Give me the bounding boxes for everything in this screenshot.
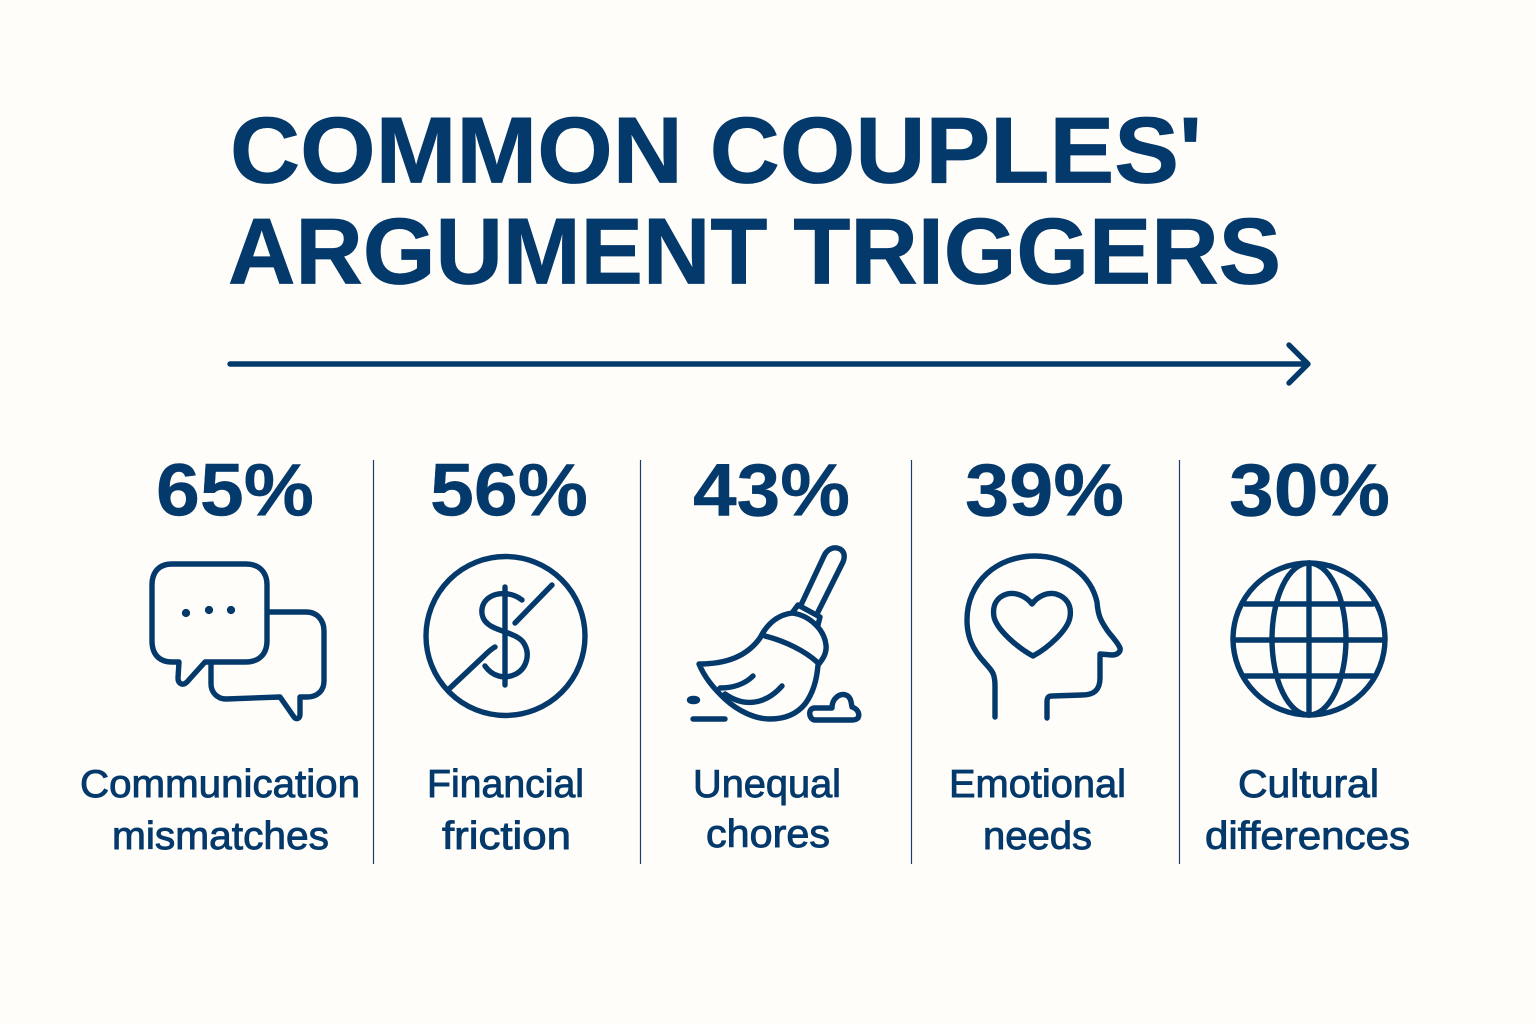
label: communication mismatches [80, 763, 360, 858]
label: financial friction: Financial [427, 763, 584, 806]
title [228, 98, 1281, 304]
icon: speech bubbles [152, 564, 324, 719]
icon: globe [1233, 563, 1385, 715]
percentage: 56%: 56% [430, 448, 588, 532]
title: ARGUMENT TRIGGERS [228, 198, 1281, 304]
label: communication mismatches: Communication [80, 763, 360, 806]
percentage: 43%: 43% [693, 448, 850, 532]
icon: crossed dollar [426, 556, 585, 716]
column: cultural differences [1205, 448, 1410, 858]
percentage: 65%: 65% [156, 448, 314, 532]
label: unequal chores: Unequal [693, 763, 841, 806]
label: unequal chores: chores [706, 813, 830, 856]
label: emotional needs [949, 763, 1126, 858]
label: cultural differences: Cultural [1238, 763, 1379, 806]
label: financial friction: friction [442, 815, 571, 858]
label: financial friction [427, 763, 584, 858]
label: cultural differences [1205, 763, 1410, 858]
column: financial friction [426, 448, 588, 858]
column: communication mismatches [80, 448, 360, 858]
percentage: 30%: 30% [1229, 448, 1390, 532]
label: unequal chores [693, 763, 841, 856]
column: emotional needs [949, 448, 1126, 858]
icon: head with heart [967, 556, 1120, 718]
column: unequal chores [690, 448, 859, 856]
title: COMMON COUPLES' [230, 98, 1202, 202]
label: emotional needs: needs [983, 815, 1092, 858]
label: cultural differences: differences [1205, 815, 1410, 858]
percentage: 39%: 39% [965, 448, 1124, 532]
label: emotional needs: Emotional [949, 763, 1126, 806]
label: communication mismatches: mismatches [112, 815, 329, 858]
icon: broom [690, 548, 859, 720]
arrow [230, 345, 1308, 383]
